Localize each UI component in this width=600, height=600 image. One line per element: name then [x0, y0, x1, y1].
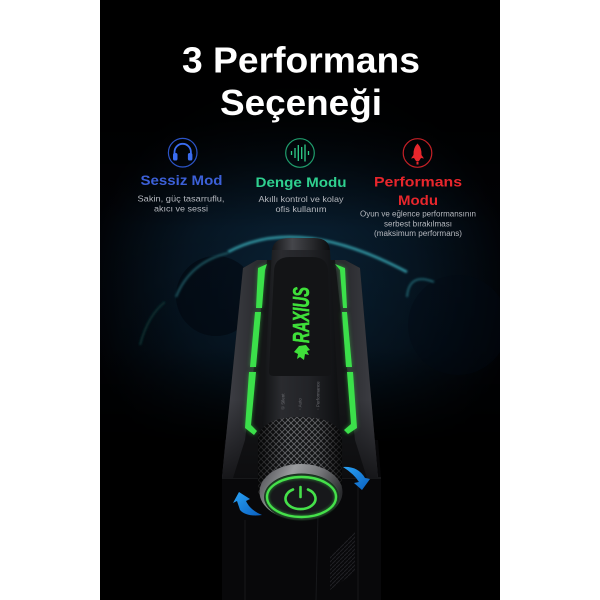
logo plate [269, 257, 331, 376]
text: Performans Modu description: (maksimum performans) [374, 229, 462, 238]
device body [222, 260, 378, 478]
text: Performans Modu description: serbest bırakılması [384, 220, 452, 228]
knob [258, 417, 342, 520]
text: Performans Modu description: Oyun ve eğlence performansının [360, 210, 476, 219]
panel: dark background [100, 0, 508, 600]
text: Sessiz Mod description: akıcı ve sessi [154, 204, 208, 214]
device: cooling pad product [222, 238, 381, 600]
text: Denge Modu description: ofis kullanım [276, 204, 326, 214]
panel: Denge Modu [256, 139, 346, 214]
heading: Performans Modu [374, 174, 462, 208]
heading: Performans Modu: Performans [374, 174, 462, 190]
heading: Denge Modu: Denge Modu [256, 174, 346, 190]
title: Seçeneği [220, 82, 382, 123]
logo: RAXIUS: RAXIUS [288, 287, 314, 343]
text: Sessiz Mod description [138, 194, 224, 214]
device base [222, 440, 381, 600]
mode labels: ◦ Performance [316, 381, 320, 410]
heading: Performans Modu: Modu [398, 192, 438, 208]
icon: sound wave [286, 139, 314, 167]
panel: Performans Modu [360, 139, 476, 238]
title [182, 40, 420, 123]
infographic canvas [100, 0, 500, 600]
icon: headphones [168, 138, 197, 167]
text: Denge Modu description: Akıllı kontrol ve kolay [258, 194, 344, 204]
text: Sessiz Mod description: Sakin, güç tasarruflu, [138, 194, 224, 204]
panel: Sessiz Mod [138, 138, 224, 214]
device top cap [272, 238, 330, 262]
arrow: rotate right [343, 467, 370, 490]
centre column [261, 250, 341, 445]
mode labels: ◦ Auto [298, 398, 302, 410]
power ring [267, 477, 336, 517]
icon: power symbol [286, 487, 316, 509]
text: Performans Modu description [360, 210, 476, 238]
mode labels [280, 381, 320, 410]
icon: lion head [294, 345, 310, 360]
green light bars [245, 264, 357, 435]
icon: rocket [403, 139, 432, 167]
logo: RAXIUS [288, 287, 314, 360]
heading: Sessiz Mod: Sessiz Mod [140, 172, 222, 188]
mode labels: ① Silent [280, 393, 286, 410]
arrow: rotate left [233, 492, 262, 515]
title: 3 Performans [182, 40, 420, 80]
text: Denge Modu description [258, 194, 344, 214]
